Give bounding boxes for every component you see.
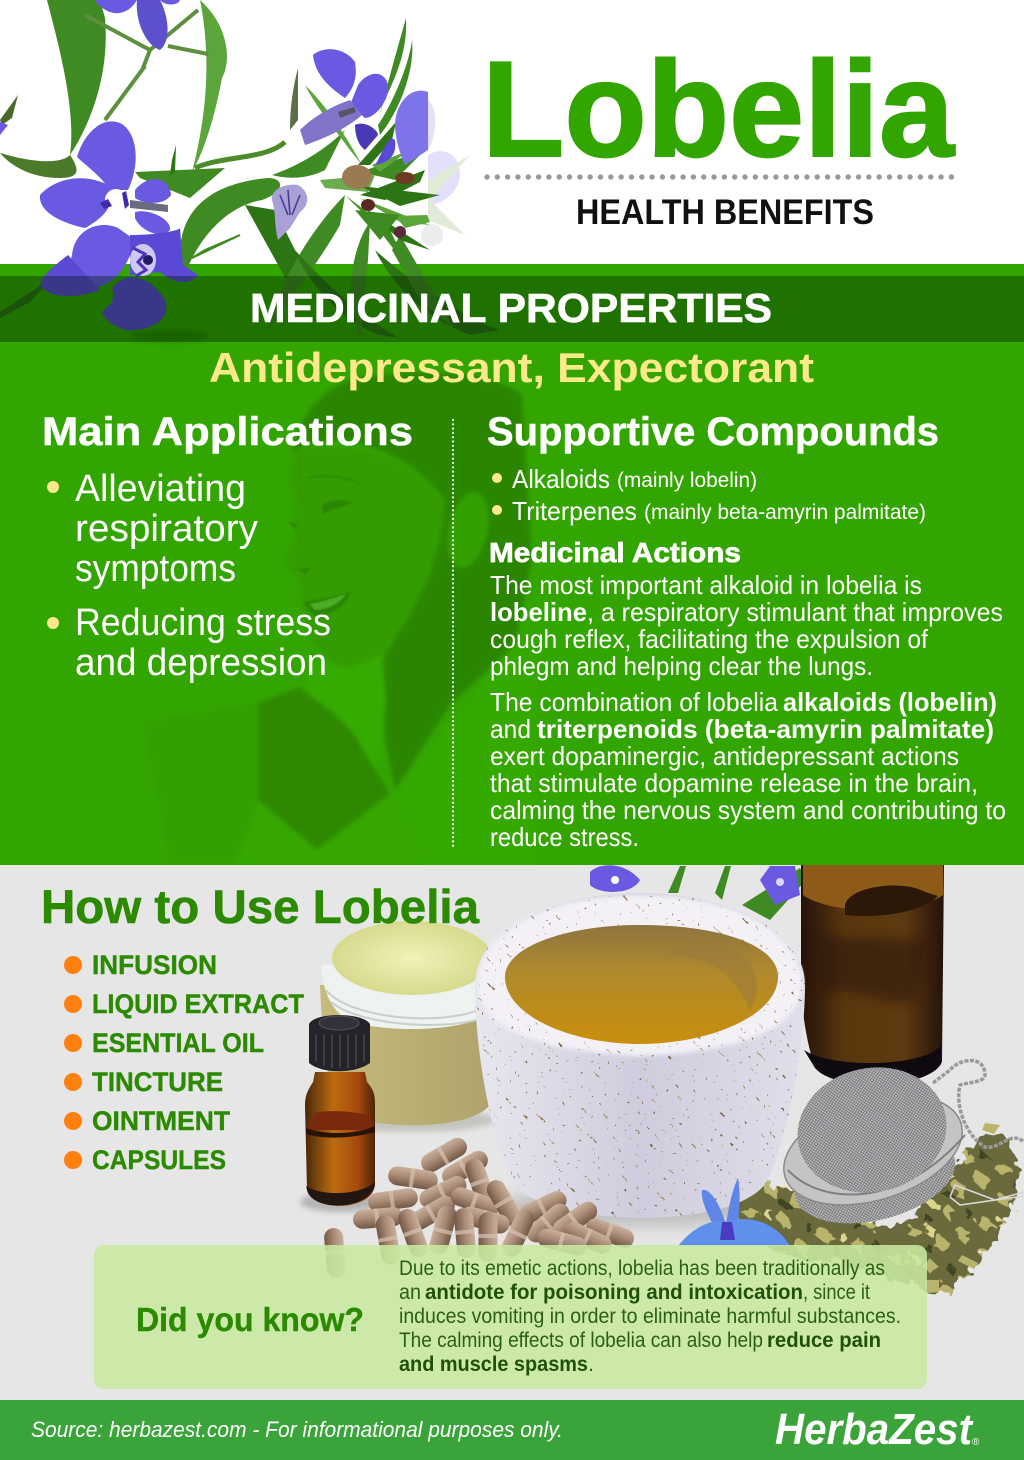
image: shadow under cup — [490, 1190, 790, 1226]
logo: HerbaZest: HerbaZest — [775, 1405, 974, 1454]
item: capsules: CAPSULES — [92, 1145, 226, 1175]
flower: bud — [272, 185, 307, 240]
callout heading: Did you know? — [136, 1301, 364, 1338]
flower: right blossom — [300, 49, 428, 165]
image: ointment jar — [320, 921, 495, 1132]
callout text: an — [399, 1280, 421, 1304]
compound: triterpenes — [492, 496, 926, 526]
bottle cap — [309, 1015, 370, 1071]
text: combination paragraph: and — [490, 714, 531, 744]
text: combination paragraph: alkaloids (lobelin) — [783, 687, 997, 717]
faded petals past the fold — [421, 100, 470, 246]
text: lobeline paragraph: , a respiratory stimulant that improves — [587, 597, 1003, 627]
heading: medicinal properties: MEDICINAL PROPERTIES — [250, 285, 772, 331]
compound: triterpenes: (mainly beta-amyrin palmitate) — [644, 501, 926, 524]
list: forms of use — [64, 950, 304, 1175]
text: combination paragraph: triterpenoids (beta-amyrin palmitate) — [537, 714, 994, 744]
image: dried herbs — [734, 1123, 1018, 1295]
text: lobeline paragraph — [490, 570, 1003, 681]
item: infusion: INFUSION — [92, 950, 217, 980]
image: woman holding mug, green duotone — [256, 371, 533, 850]
bullet: alleviating respiratory symptoms: respiratory — [75, 508, 258, 550]
band: dark title strip — [0, 276, 1024, 342]
bullet: alleviating respiratory symptoms — [47, 468, 258, 590]
callout text — [399, 1256, 901, 1376]
callout text: induces vomiting in order to eliminate harmful substances. — [399, 1304, 901, 1328]
heading: how to use lobelia: How to Use Lobelia — [41, 880, 480, 933]
image: mesh tea infuser — [770, 1054, 1024, 1239]
item: ointment: OINTMENT — [92, 1106, 230, 1136]
callout text: reduce pain — [767, 1328, 881, 1352]
flower: top cut-off blossom — [95, 0, 180, 50]
image: brown dropper bottle — [801, 865, 944, 1085]
text: combination paragraph: reduce stress. — [490, 822, 639, 852]
text: combination paragraph: The combination of lobelia — [490, 687, 779, 717]
image: speckled tea cup — [475, 892, 806, 1218]
text: combination paragraph — [490, 687, 1006, 852]
text: combination paragraph: exert dopaminergic, antidepressant actions — [490, 741, 959, 771]
cup speckles — [475, 895, 805, 1218]
callout text: The calming effects of lobelia can also help — [399, 1328, 763, 1352]
compound: alkaloids: (mainly lobelin) — [617, 469, 757, 492]
panel: main applications — [42, 410, 413, 684]
shadow under blossom — [130, 330, 210, 342]
text: lobeline paragraph: The most important alkaloid in lobelia is — [490, 570, 922, 600]
bullet: reducing stress and depression — [47, 602, 331, 684]
dotted divider — [487, 174, 956, 180]
heading: medicinal actions: Medicinal Actions — [489, 537, 741, 568]
flower: central blossom — [0, 121, 171, 234]
text: lobeline paragraph: cough reflex, facilitating the expulsion of — [490, 624, 929, 654]
footer source: Source: herbazest.com - For informational purposes only. — [31, 1417, 563, 1442]
callout box — [94, 1245, 927, 1389]
leaf cluster — [320, 150, 440, 270]
panel: supportive compounds — [487, 410, 1006, 852]
callout: did you know — [94, 1245, 927, 1389]
text: lobeline paragraph: lobeline — [490, 597, 587, 627]
footer bar — [0, 1400, 1024, 1460]
callout text: Due to its emetic actions, lobelia has been traditionally as — [399, 1256, 885, 1280]
bullet: alleviating respiratory symptoms: Alleviating — [75, 468, 246, 510]
bullet: reducing stress and depression: Reducing stress — [75, 602, 331, 644]
text: lobeline paragraph: phlegm and helping clear the lungs. — [490, 651, 873, 681]
bullet: alleviating respiratory symptoms: symptoms — [75, 548, 236, 590]
subtitle: HEALTH BENEFITS — [576, 193, 874, 232]
heading: supportive compounds: Supportive Compounds — [487, 410, 939, 454]
text: combination paragraph: that stimulate dopamine release in the brain, — [490, 768, 978, 798]
compound: alkaloids: Alkaloids — [512, 464, 610, 494]
item: esential oil: ESENTIAL OIL — [92, 1028, 264, 1058]
face details — [288, 476, 360, 616]
text: combination paragraph: calming the nervous system and contributing to — [490, 795, 1006, 825]
item: liquid extract: LIQUID EXTRACT — [92, 989, 304, 1019]
image: lobelia flower sprig — [0, 0, 500, 342]
image: blue flower on herbs — [678, 1178, 790, 1246]
logo: HerbaZest: ® — [972, 1437, 980, 1448]
panel: how to use background — [0, 865, 1024, 1400]
stems and leaves — [0, 0, 500, 340]
callout text: and muscle spasms — [399, 1352, 588, 1376]
image: small flowers behind cup — [590, 865, 806, 920]
tea liquid — [505, 925, 778, 1044]
title: Lobelia — [482, 33, 955, 185]
text: properties list: Antidepressant, Expectorant — [209, 344, 814, 391]
dotted column divider — [452, 420, 454, 846]
compound: alkaloids — [492, 464, 757, 494]
bullet: reducing stress and depression: and depression — [75, 642, 327, 684]
flower: lower blossom — [40, 225, 198, 330]
callout text: antidote for poisoning and intoxication — [425, 1280, 803, 1304]
image: brown herbal capsules — [323, 1134, 637, 1279]
callout text: . — [588, 1352, 594, 1376]
item: tincture: TINCTURE — [92, 1067, 223, 1097]
heading: main applications: Main Applications — [42, 410, 413, 454]
compound: triterpenes: Triterpenes — [512, 496, 637, 526]
callout text: , since it — [803, 1280, 870, 1304]
image: amber essential oil bottle — [300, 1015, 380, 1212]
panel: green properties background — [0, 264, 1024, 865]
